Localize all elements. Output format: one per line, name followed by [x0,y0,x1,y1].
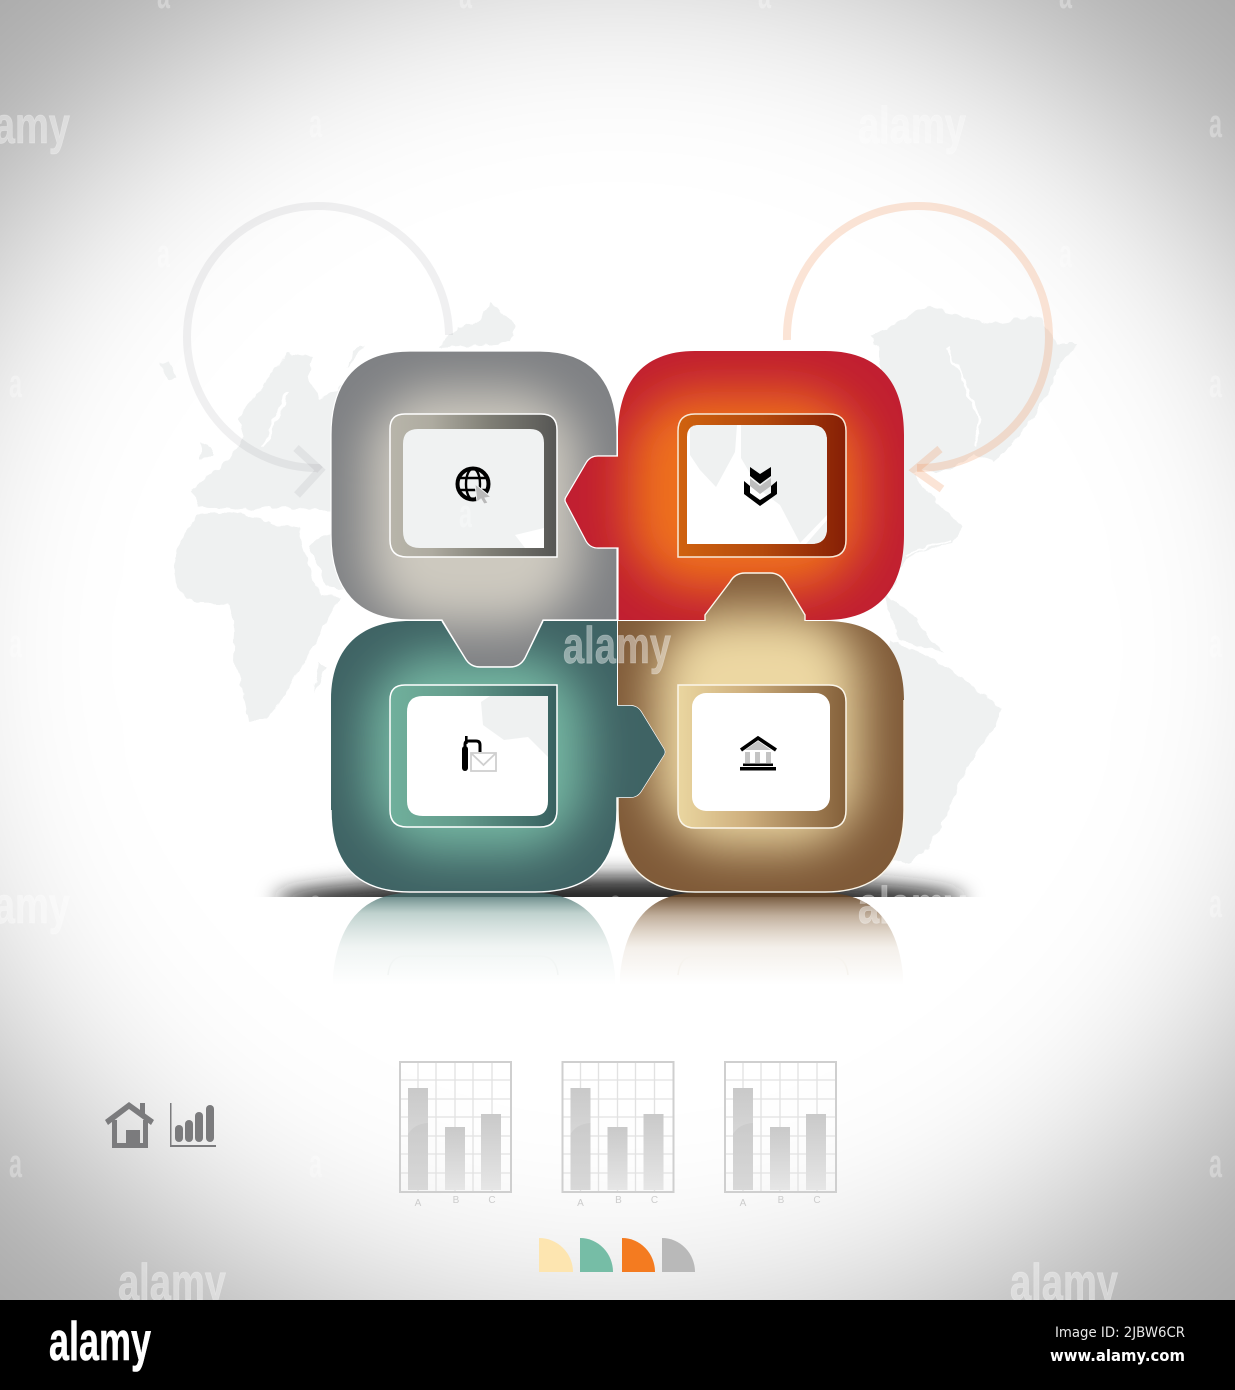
world map backdrop [160,303,1077,864]
legend: quarter-circle swatches [539,1238,695,1272]
ground shadow [264,858,976,897]
grey window [403,429,544,548]
panel: red puzzle piece [565,351,904,620]
icon: bank building [740,738,776,770]
watermark text: a [9,1142,22,1186]
watermark text: a [1209,362,1222,406]
watermark text: alamy [858,97,966,155]
watermark text: alamy [858,877,966,935]
footer bar [0,1300,1235,1390]
watermark text: a [459,492,472,536]
teal window [407,696,548,816]
red inner frame [678,414,846,557]
footer image id: Image ID: 2JBW6CR [1055,1325,1185,1341]
watermark text: a [1209,1142,1222,1186]
chart: bar chart 1 [400,1062,511,1209]
watermark text: a [309,882,322,926]
brown inner frame [678,685,846,828]
teal inner frame [390,685,557,827]
footer url: www.alamy.com [1050,1346,1185,1365]
watermark text: a [609,882,622,926]
watermark text: alamy [563,617,671,675]
watermark text: a [9,622,22,666]
watermark text: a [309,102,322,146]
watermark text: a [1209,622,1222,666]
chart: bar chart 1: C [488,1195,496,1206]
reflection of brown piece [620,893,903,985]
watermark text: alamy [118,1254,226,1312]
chart: bar chart 1: A [415,1198,422,1209]
chart: bar chart 3: B [778,1195,785,1206]
watermark text: a [1059,232,1072,276]
watermark text: a [309,1142,322,1186]
chart: bar chart 2: B [615,1195,622,1206]
chart: bar chart 2 [562,1062,674,1209]
watermark text: a [1209,882,1222,926]
panel: teal puzzle piece [331,621,666,892]
chart: bar chart 3 [725,1062,836,1209]
watermark text: alamy [1010,1254,1118,1312]
icon: bar chart [170,1103,216,1147]
arrow: grey circular arrow [187,206,449,495]
grey inner frame [390,414,557,557]
chart: bar chart 3: C [813,1195,821,1206]
icon: house [105,1102,154,1148]
icon: chevrons [744,467,777,506]
panel: brown puzzle piece [618,573,904,892]
icon: globe with cursor [458,468,491,504]
chart: bar chart 2: C [651,1195,658,1206]
chart: bar chart 2: A [577,1198,584,1209]
watermark text: a [1209,102,1222,146]
watermark text: a [9,362,22,406]
chart: bar chart 1: B [453,1195,460,1206]
panel: grey puzzle piece [331,351,617,667]
watermark text: a [157,232,170,276]
icon: phone with envelope [462,736,496,771]
arrow: orange circular arrow [787,206,1049,489]
reflection of teal piece [333,893,615,985]
chart: bar chart 3: A [740,1198,747,1209]
footer logo: alamy [49,1310,151,1372]
red window [687,425,827,544]
brown window [692,693,830,811]
